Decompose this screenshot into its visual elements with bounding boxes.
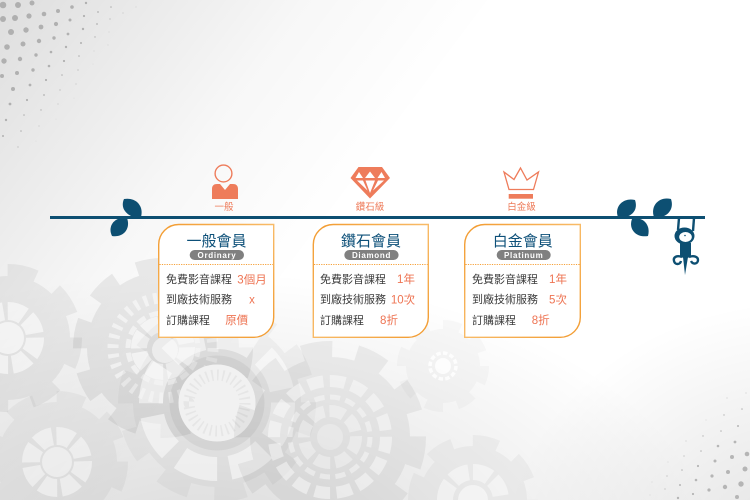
row: 訂購課程: 訂購課程: [320, 313, 364, 327]
title: 鑽石會員: 鑽石會員: [341, 233, 401, 250]
leaves: left pair: [110, 199, 142, 236]
row: 訂購課程: [472, 313, 550, 327]
tag: Ordinary: Ordinary: [198, 251, 236, 260]
row: 免費影音課程: 3個月: [237, 274, 267, 286]
halftone dots: bottom right: [650, 392, 749, 499]
row: 到廠技術服務: 5次: [549, 294, 567, 306]
row: 免費影音課程: 1年: [549, 272, 567, 286]
panel: 白金會員: [465, 224, 580, 337]
tag: Platinum: Platinum: [504, 251, 543, 260]
row: 免費影音課程: [166, 272, 267, 286]
row: 訂購課程: [320, 313, 398, 327]
row: 到廠技術服務: 10次: [391, 294, 416, 306]
icon: person (一般): [212, 165, 238, 199]
timeline bar: [50, 216, 705, 219]
tag: Diamond: Diamond: [352, 251, 391, 260]
label: 一般: 一般: [214, 201, 234, 213]
row: 訂購課程: 8折: [532, 313, 550, 327]
row: 免費影音課程: [320, 272, 415, 286]
leaves: right group: [617, 198, 672, 236]
row: 訂購課程: 原價: [225, 313, 249, 327]
row: 到廠技術服務: [320, 292, 416, 306]
panel: 鑽石會員: [313, 224, 428, 337]
row: 到廠技術服務: [166, 292, 255, 306]
row: 訂購課程: 訂購課程: [472, 313, 516, 327]
icon: diamond (鑽石級): [350, 167, 390, 198]
row: 免費影音課程: 免費影音課程: [166, 272, 232, 286]
icon: hanging monkey: [674, 218, 698, 275]
row: 到廠技術服務: x: [249, 294, 255, 306]
row: 免費影音課程: 免費影音課程: [320, 272, 386, 286]
row: 免費影音課程: 免費影音課程: [472, 272, 538, 286]
row: 到廠技術服務: 到廠技術服務: [472, 292, 538, 306]
label: 白金級: 白金級: [507, 201, 536, 213]
row: 訂購課程: 訂購課程: [166, 313, 210, 327]
row: 到廠技術服務: 到廠技術服務: [320, 292, 386, 306]
row: 訂購課程: 8折: [380, 313, 398, 327]
title: 白金會員: 白金會員: [493, 233, 553, 250]
row: 到廠技術服務: 到廠技術服務: [166, 292, 232, 306]
row: 免費影音課程: 1年: [397, 272, 415, 286]
row: 訂購課程: [166, 313, 249, 327]
row: 到廠技術服務: [472, 292, 567, 306]
halftone dots: top left: [0, 0, 136, 148]
row: 免費影音課程: [472, 272, 567, 286]
panel: 一般會員: [159, 224, 274, 337]
label: 鑽石級: 鑽石級: [356, 201, 385, 213]
icon: crown (白金級): [504, 168, 538, 199]
title: 一般會員: 一般會員: [186, 233, 247, 250]
